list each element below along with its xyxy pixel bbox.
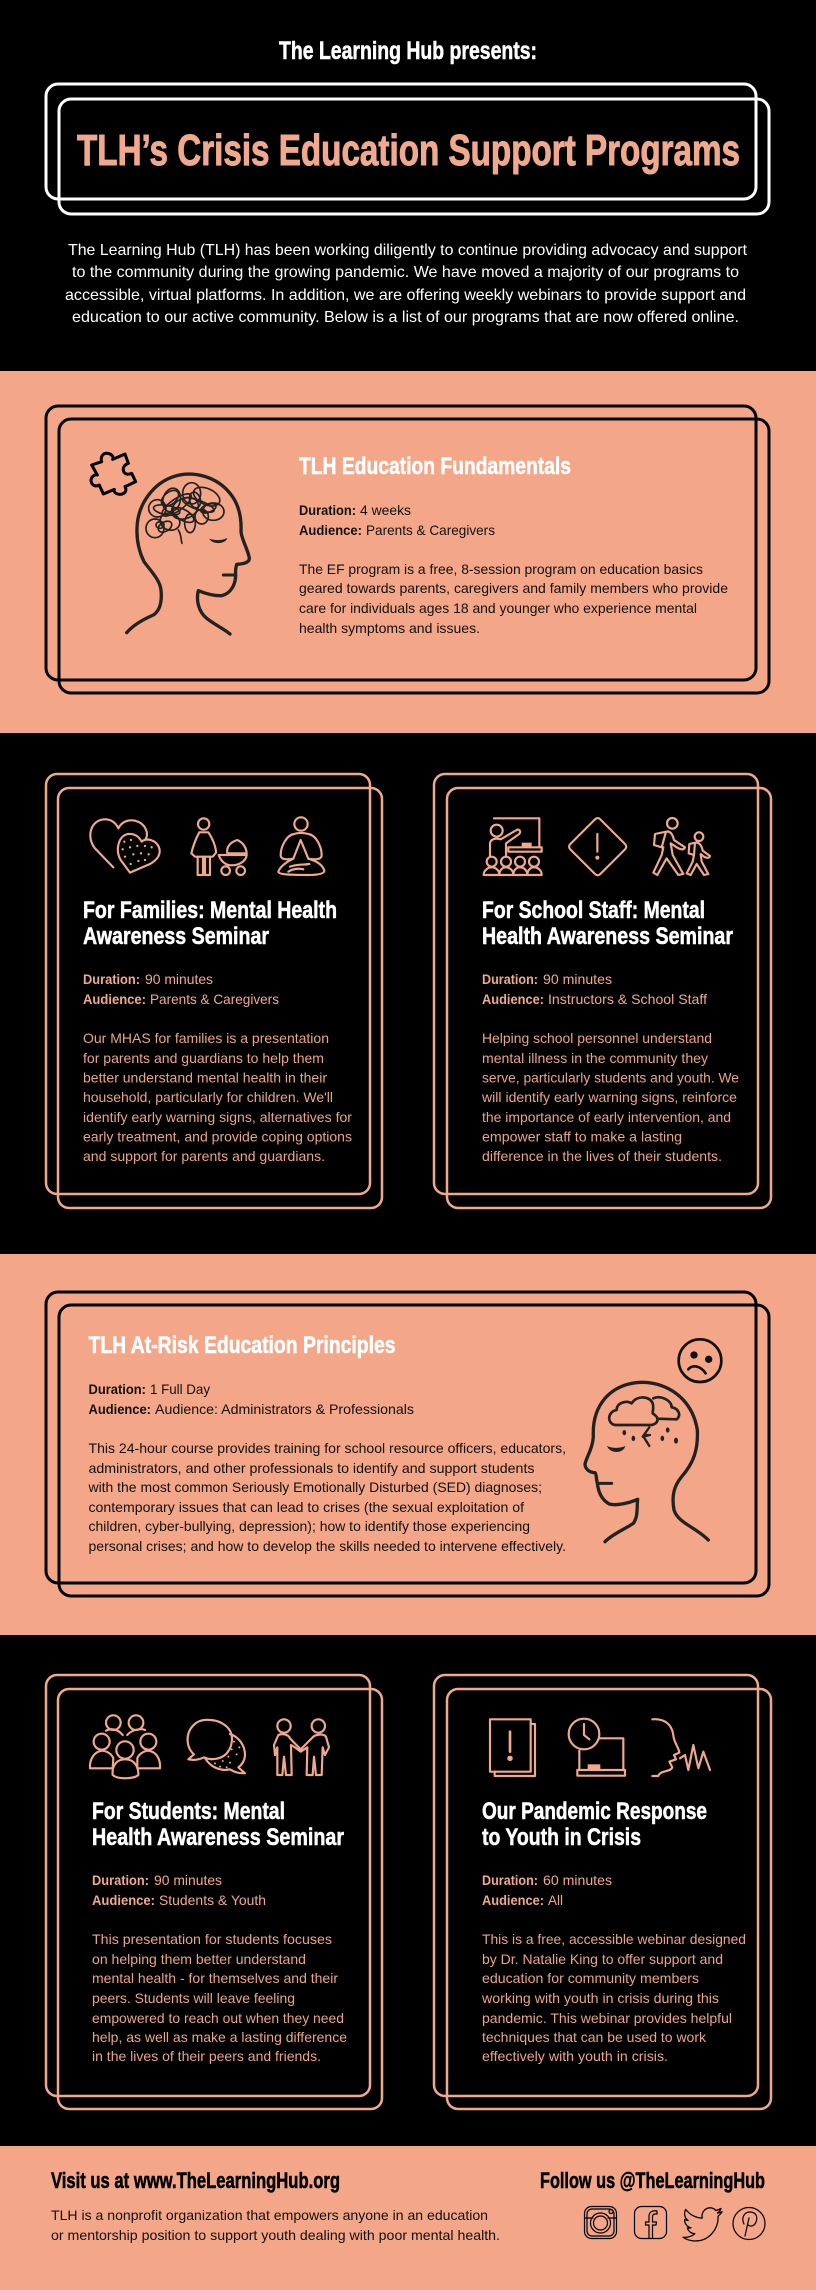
description: in the lives of their peers and friends. [92, 2048, 321, 2064]
heading: For School Staff: Mental [482, 897, 705, 924]
intro paragraph: accessible, virtual platforms. In addition, we are offering weekly webinars to provide support and [65, 287, 746, 304]
description: difference in the lives of their students. [482, 1148, 722, 1164]
icon: meditating person [278, 817, 324, 875]
icon: alert book [490, 1719, 535, 1776]
description: working with youth in crisis during this [481, 1990, 719, 2006]
details: duration and audience [92, 1872, 266, 1908]
details: duration and audience: Audience: [88, 1401, 151, 1417]
description: serve, particularly students and youth. We [482, 1070, 739, 1086]
icon: facebook [634, 2206, 666, 2238]
details: duration and audience: Audience: Administrators & Professionals [155, 1401, 414, 1417]
description: household, particularly for children. We'll [83, 1089, 333, 1105]
description: mental health - for themselves and their [92, 1970, 338, 1986]
heading: TLH Education Fundamentals [299, 453, 571, 480]
details: duration and audience: Students & Youth [159, 1892, 266, 1908]
description: mental illness in the community they [482, 1050, 708, 1066]
details: duration and audience: 90 minutes [154, 1872, 222, 1888]
description: pandemic. This webinar provides helpful [482, 2010, 732, 2026]
description [88, 1440, 566, 1554]
description: with the most common Seriously Emotionally Disturbed (SED) diagnoses; [88, 1479, 542, 1495]
panel: For Students [46, 1675, 382, 2109]
details: duration and audience: Duration: [299, 502, 356, 518]
description: better understand mental health in their [83, 1070, 327, 1086]
description: This presentation for students focuses [92, 1931, 332, 1947]
description: for parents and guardians to help them [83, 1050, 324, 1066]
panel frame [46, 1292, 769, 1596]
icon: twitter [683, 2208, 722, 2241]
details: duration and audience: Audience: [482, 991, 544, 1007]
description: and support for parents and guardians. [83, 1148, 325, 1164]
panel: TLH Education Fundamentals [46, 406, 769, 693]
icon: clock and laptop [569, 1719, 625, 1776]
description: personal crises; and how to develop the skills needed to intervene effectively. [88, 1538, 566, 1554]
description: by Dr. Natalie King to offer support and [482, 1951, 723, 1967]
details: duration and audience: Audience: [299, 522, 362, 538]
details: duration and audience: Audience: [482, 1892, 544, 1908]
description: This is a free, accessible webinar designed [482, 1931, 746, 1947]
details: duration and audience: Instructors & School Staff [548, 991, 707, 1007]
description: The EF program is a free, 8-session program on education basics [299, 561, 703, 577]
description: early treatment, and provide coping options [83, 1128, 352, 1144]
icon: instagram [584, 2206, 616, 2238]
website call to action: Visit us at www.TheLearningHub.org [51, 2168, 340, 2193]
description: contemporary issues that can lead to crises (the sexual exploitation of [88, 1499, 524, 1515]
details: duration and audience: 4 weeks [360, 502, 411, 518]
description: peers. Students will leave feeling [92, 1990, 295, 2006]
heading: to Youth in Crisis [482, 1824, 641, 1851]
heading [482, 1798, 707, 1851]
description [299, 561, 728, 636]
icon: woman with stroller [191, 818, 247, 875]
heading: Our Pandemic Response [482, 1798, 707, 1825]
details: duration and audience: 90 minutes [543, 971, 612, 987]
icon: teacher with classroom [484, 818, 542, 875]
description: health symptoms and issues. [299, 620, 480, 636]
description: care for individuals ages 18 and younger who experience mental [299, 600, 697, 616]
icon: sad face [679, 1339, 721, 1382]
details: duration and audience: Duration: [88, 1381, 146, 1397]
panel: header [46, 37, 769, 326]
details: duration and audience: Duration: [482, 971, 538, 987]
organization description [51, 2207, 500, 2243]
description [92, 1931, 347, 2064]
title frame [46, 84, 769, 214]
icon: adult and child walking [653, 818, 710, 875]
icon: head with tangled thoughts and puzzle piece [91, 453, 249, 634]
description [83, 1030, 352, 1164]
details: duration and audience [482, 1872, 612, 1908]
details: duration and audience: 1 Full Day [150, 1381, 210, 1397]
description: children, cyber-bullying, depression); how to identify those experiencing [88, 1518, 530, 1534]
presenter line: The Learning Hub presents: [279, 37, 537, 65]
heading: Health Awareness Seminar [92, 1824, 344, 1851]
details: duration and audience: 90 minutes [145, 971, 213, 987]
description: education for community members [482, 1970, 699, 1986]
heading: Awareness Seminar [83, 923, 269, 950]
details: duration and audience: Duration: [92, 1872, 149, 1888]
description: geared towards parents, caregivers and family members who provide [299, 580, 728, 596]
details: duration and audience: All [548, 1892, 563, 1908]
description: Our MHAS for families is a presentation [83, 1030, 329, 1046]
details: duration and audience [299, 502, 495, 538]
details: duration and audience: Parents & Caregivers [150, 991, 279, 1007]
icon: two people shaking hands [274, 1719, 329, 1775]
heading: TLH At-Risk Education Principles [88, 1332, 396, 1359]
organization description: TLH is a nonprofit organization that empowers anyone in an education [51, 2207, 488, 2223]
panel: For Families [46, 774, 382, 1208]
panel frame [46, 774, 382, 1208]
description [481, 1931, 746, 2064]
intro paragraph [65, 242, 748, 326]
description: empower staff to make a lasting [482, 1128, 682, 1144]
icon: pinterest [733, 2208, 765, 2240]
heading: For Families: Mental Health [83, 897, 337, 924]
details: duration and audience: Duration: [482, 1872, 538, 1888]
panel: TLH At-Risk Education Principles [46, 1292, 769, 1596]
organization description: or mentorship position to support youth dealing with poor mental health. [51, 2227, 500, 2243]
description: empowered to reach out when they need [92, 2010, 344, 2026]
details: duration and audience: Duration: [83, 971, 140, 987]
panel: For School Staff [434, 774, 771, 1208]
details: duration and audience: Audience: [92, 1892, 155, 1908]
description [481, 1030, 739, 1164]
panel: footer [51, 2168, 765, 2243]
intro paragraph: education to our active community. Below is a list of our programs that are now offered online. [72, 309, 739, 326]
icon: warning diamond [569, 818, 626, 875]
description: Helping school personnel understand [482, 1030, 712, 1046]
details: duration and audience [482, 971, 707, 1007]
description: administrators, and other professionals to identify and support students [88, 1460, 534, 1476]
heading [92, 1798, 344, 1851]
icon: speech bubbles [188, 1720, 245, 1773]
heading: Health Awareness Seminar [482, 923, 733, 950]
description: This 24-hour course provides training for school resource officers, educators, [88, 1440, 566, 1456]
intro paragraph: to the community during the growing pandemic. We have moved a majority of our programs to [72, 264, 739, 281]
heading [83, 897, 337, 950]
details: duration and audience [88, 1381, 414, 1417]
details: duration and audience: Audience: [83, 991, 146, 1007]
heading [482, 897, 733, 950]
heading: For Students: Mental [92, 1798, 285, 1825]
details: duration and audience [83, 971, 279, 1007]
description: help, as well as make a lasting difference [92, 2029, 347, 2045]
icon: hearts [90, 819, 160, 873]
description: techniques that can be used to work [482, 2029, 707, 2045]
description: will identify early warning signs, reinforce [481, 1089, 737, 1105]
description: the importance of early intervention, and [482, 1109, 731, 1125]
panel frame [46, 1675, 382, 2109]
panel frame [434, 774, 771, 1208]
description: identify early warning signs, alternatives for [83, 1109, 352, 1125]
details: duration and audience: Parents & Caregivers [366, 522, 495, 538]
details: duration and audience: 60 minutes [543, 1872, 612, 1888]
description: on helping them better understand [92, 1951, 306, 1967]
description: effectively with youth in crisis. [482, 2048, 668, 2064]
panel: Our Pandemic Response [434, 1675, 771, 2109]
intro paragraph: The Learning Hub (TLH) has been working diligently to continue providing advocacy and support [68, 242, 748, 259]
icon: speaking face with wave [652, 1719, 710, 1776]
panel frame [434, 1675, 771, 2109]
icon: group of people [90, 1715, 160, 1778]
icon: head with storm cloud [585, 1382, 708, 1542]
panel frame [46, 406, 769, 693]
